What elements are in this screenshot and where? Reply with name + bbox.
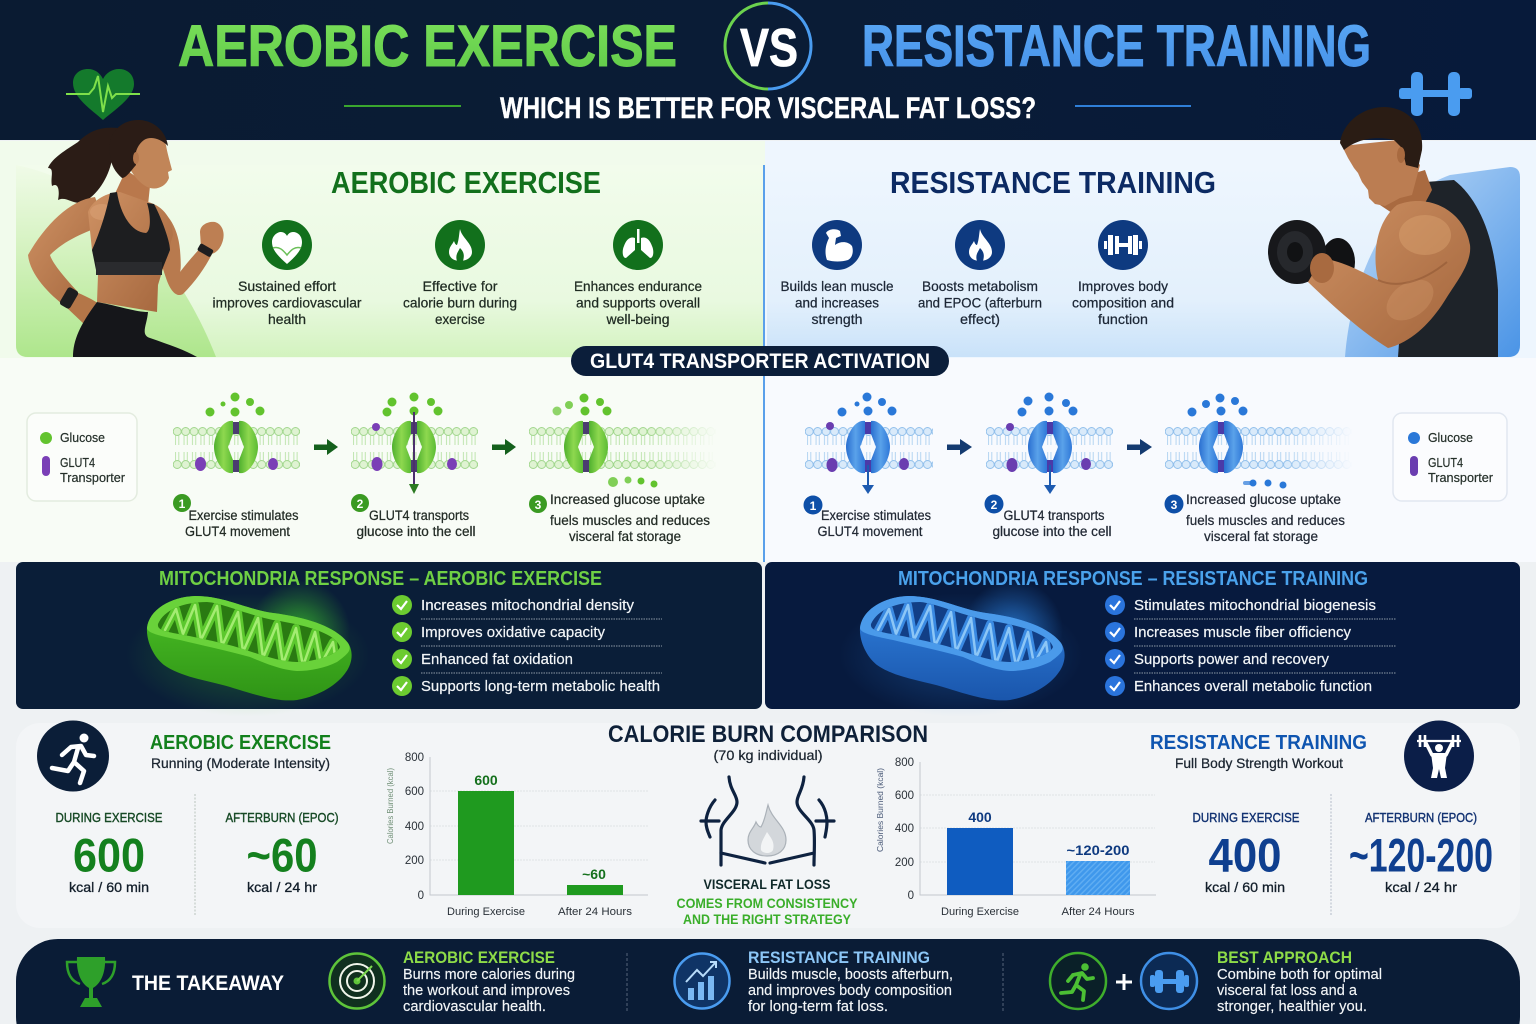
- diagram: step 2: [984, 392, 1113, 539]
- checklist: Increases mitochondrial density: [421, 597, 634, 614]
- centre subheading: (70 kg individual): [714, 747, 822, 763]
- illustration: green mitochondrion: [144, 584, 353, 710]
- legend: aerobic: GLUT4: [60, 456, 95, 470]
- benefit: body composition: [1072, 220, 1174, 327]
- icon: heart with pulse: [66, 69, 140, 120]
- heading: AEROBIC EXERCISE: [331, 165, 601, 200]
- panel: aerobic exercise intro: [0, 120, 765, 358]
- arrow: [492, 439, 516, 455]
- legend: aerobic: [27, 413, 137, 501]
- icon: runner ring: [1050, 953, 1106, 1009]
- takeaway: best approach: BEST APPROACH: [1217, 948, 1352, 967]
- diagram: step 2: glucose into the cell: [356, 524, 476, 539]
- checklist: Supports power and recovery: [1134, 651, 1329, 668]
- resistance stats: AFTERBURN (EPOC): [1365, 810, 1477, 825]
- checklist: [1105, 595, 1396, 696]
- heading: MITOCHONDRIA RESPONSE – AEROBIC EXERCISE: [159, 568, 602, 590]
- checklist: Enhances overall metabolic function: [1134, 678, 1372, 695]
- banner: GLUT4 transporter activation: GLUT4 TRANSPORTER ACTIVATION: [590, 350, 930, 373]
- takeaway: best approach: [1050, 948, 1382, 1015]
- legend: resistance: Transporter: [1428, 471, 1493, 485]
- arrow: [314, 439, 338, 455]
- benefit: lean muscle: and increases: [795, 294, 879, 310]
- bar chart: aerobic: [386, 752, 648, 918]
- resistance stats: 400: [1208, 828, 1282, 882]
- legend: aerobic: Glucose: [60, 431, 105, 445]
- benefit: metabolism: and EPOC (afterburn: [918, 294, 1042, 310]
- heading: RESISTANCE TRAINING: [890, 165, 1216, 200]
- bar chart: aerobic: 600: [474, 772, 498, 788]
- takeaway: best approach: stronger, healthier you.: [1217, 999, 1367, 1015]
- diagram: step 2: [351, 392, 478, 539]
- takeaway: resistance: [674, 948, 953, 1015]
- benefit: body composition: composition and: [1072, 294, 1174, 310]
- icon: trophy: [67, 957, 115, 1007]
- VS badge: [725, 3, 811, 89]
- takeaway: aerobic: cardiovascular health.: [403, 999, 546, 1015]
- checklist: Improves oxidative capacity: [421, 624, 605, 641]
- bar chart: resistance: During Exercise: [941, 906, 1019, 918]
- diagram: step 1: 1: [810, 499, 817, 513]
- takeaway: resistance: Builds muscle, boosts afterburn,: [748, 967, 953, 983]
- bar chart: aerobic: During Exercise: [447, 906, 525, 918]
- bar chart: resistance: ~120-200: [1066, 842, 1130, 858]
- diagram: step 3: 3: [535, 498, 542, 512]
- bar chart: aerobic: 400: [405, 821, 424, 833]
- arrow: [947, 439, 972, 455]
- message: visceral fat loss: [676, 876, 858, 927]
- header band: [0, 0, 1536, 140]
- illustration: blue mitochondrion: [856, 584, 1066, 708]
- takeaway: aerobic: AEROBIC EXERCISE: [403, 948, 555, 967]
- bar chart: aerobic: 600: [405, 786, 424, 798]
- diagram: step 1: [173, 392, 300, 539]
- bar chart: aerobic: 800: [405, 752, 424, 764]
- diagram: step 3: fuels muscles and reduces: [550, 512, 710, 528]
- VS badge: VS: [740, 18, 798, 78]
- benefit: calorie burn: exercise: [435, 311, 485, 327]
- benefit: metabolism: effect): [960, 311, 1000, 327]
- icon: target: [330, 954, 384, 1008]
- title: resistance training: RESISTANCE TRAINING: [862, 14, 1371, 79]
- benefit: lean muscle: strength: [812, 311, 862, 327]
- panel: the takeaway: [16, 939, 1520, 1024]
- aerobic stats: [37, 720, 338, 916]
- resistance stats: DURING EXERCISE: [1192, 810, 1300, 825]
- title: aerobic exercise: AEROBIC EXERCISE: [178, 14, 677, 79]
- diagram: step 2: 2: [357, 497, 364, 511]
- heading: THE TAKEAWAY: [132, 972, 284, 995]
- takeaway: best approach: Combine both for optimal: [1217, 967, 1382, 983]
- diagram: step 2: glucose into the cell: [992, 524, 1112, 539]
- plus sign: [1116, 974, 1132, 990]
- aerobic stats: kcal / 60 min: [69, 879, 149, 895]
- checklist: [392, 595, 662, 696]
- icon: torso with flame: [701, 777, 834, 865]
- takeaway: resistance: for long-term fat loss.: [748, 999, 888, 1015]
- legend: resistance: GLUT4: [1428, 456, 1463, 470]
- takeaway: resistance: RESISTANCE TRAINING: [748, 948, 930, 967]
- resistance stats: kcal / 24 hr: [1385, 879, 1457, 895]
- benefit: lean muscle: Builds lean muscle: [780, 278, 894, 294]
- takeaway: aerobic: [330, 948, 575, 1015]
- diagram: step 3: visceral fat storage: [1204, 528, 1318, 544]
- icon: rising chart: [674, 954, 730, 1008]
- panel: mitochondria aerobic: [16, 562, 762, 717]
- bar chart: aerobic: 0: [418, 890, 424, 902]
- checklist: Supports long-term metabolic health: [421, 678, 660, 695]
- panel: mitochondria resistance: [765, 562, 1520, 717]
- checklist: Stimulates mitochondrial biogenesis: [1134, 597, 1376, 614]
- benefit: endurance: and supports overall: [576, 294, 700, 310]
- subtitle: WHICH IS BETTER FOR VISCERAL FAT LOSS?: [500, 92, 1036, 125]
- centre heading: CALORIE BURN COMPARISON: [608, 721, 928, 748]
- icon: runner badge: [37, 720, 109, 792]
- bar chart: resistance: 0: [908, 890, 914, 902]
- resistance stats: RESISTANCE TRAINING: [1150, 732, 1367, 754]
- legend: resistance: [1393, 413, 1507, 501]
- aerobic stats: Running (Moderate Intensity): [151, 755, 330, 771]
- legend: aerobic: Transporter: [60, 471, 125, 485]
- benefit: body composition: function: [1098, 311, 1148, 327]
- diagram: step 1: Exercise stimulates: [188, 508, 299, 523]
- panel: GLUT4 aerobic side: [0, 358, 764, 562]
- message: visceral fat loss: AND THE RIGHT STRATEGY: [683, 911, 852, 927]
- diagram: step 3: Increased glucose uptake: [550, 491, 705, 507]
- benefit: metabolism: Boosts metabolism: [922, 278, 1038, 294]
- panel: GLUT4 resistance side: [765, 358, 1536, 562]
- checklist: Enhanced fat oxidation: [421, 651, 573, 668]
- diagram: step 1: GLUT4 movement: [185, 524, 290, 539]
- benefit: endurance: [574, 220, 702, 327]
- bar chart: aerobic: 200: [405, 855, 424, 867]
- bar chart: resistance: 400: [895, 823, 914, 835]
- icon: weightlifter badge: [1404, 720, 1474, 792]
- benefit: metabolism: [918, 220, 1042, 327]
- resistance stats: Full Body Strength Workout: [1175, 755, 1343, 771]
- benefit: endurance: well-being: [606, 311, 670, 327]
- diagram: step 3: visceral fat storage: [569, 528, 681, 544]
- bar chart: resistance: 200: [895, 857, 914, 869]
- takeaway: aerobic: the workout and improves: [403, 983, 570, 999]
- heading: MITOCHONDRIA RESPONSE – RESISTANCE TRAINING: [898, 568, 1368, 590]
- diagram: step 3: Increased glucose uptake: [1186, 491, 1341, 507]
- bar chart: resistance: [876, 757, 1156, 918]
- diagram: step 2: GLUT4 transports: [369, 508, 469, 523]
- benefit: cardiovascular: health: [268, 311, 306, 327]
- bar chart: resistance: 800: [895, 757, 914, 769]
- diagram: step 1: 1: [179, 497, 186, 511]
- legend: resistance: Glucose: [1428, 431, 1473, 445]
- benefit: cardiovascular: improves cardiovascular: [212, 294, 362, 310]
- benefit: calorie burn: calorie burn during: [403, 294, 517, 310]
- aerobic stats: AFTERBURN (EPOC): [226, 810, 338, 825]
- takeaway: best approach: visceral fat loss and a: [1217, 983, 1358, 999]
- benefit: lean muscle: [780, 220, 894, 327]
- figure: female runner: [28, 120, 224, 357]
- bar chart: aerobic: Calories Burned (kcal): [386, 768, 395, 844]
- bar chart: aerobic: ~60: [582, 866, 606, 882]
- benefit: calorie burn: [403, 220, 517, 327]
- checklist: Increases muscle fiber officiency: [1134, 624, 1351, 641]
- bar chart: resistance: After 24 Hours: [1062, 906, 1135, 918]
- benefit: cardiovascular: Sustained effort: [238, 278, 336, 294]
- benefit: endurance: Enhances endurance: [574, 278, 702, 294]
- diagram: step 2: GLUT4 transports: [1004, 508, 1105, 523]
- diagram: step 3: 3: [1171, 498, 1178, 512]
- diagram: step 3: [1164, 394, 1353, 544]
- icon: dumbbell ring: [1141, 953, 1197, 1009]
- diagram: step 3: [529, 394, 718, 544]
- aerobic stats: AEROBIC EXERCISE: [150, 732, 331, 754]
- aerobic stats: kcal / 24 hr: [247, 879, 317, 895]
- aerobic stats: 600: [73, 828, 145, 882]
- benefit: calorie burn: Effective for: [422, 278, 498, 294]
- figure: man with dumbbell: [1268, 107, 1498, 357]
- arrow: [1127, 439, 1152, 455]
- diagram: step 3: fuels muscles and reduces: [1186, 512, 1345, 528]
- bar chart: aerobic: After 24 Hours: [558, 906, 633, 918]
- diagram: step 1: GLUT4 movement: [818, 524, 923, 539]
- bar chart: resistance: Calories Burned (kcal): [876, 768, 885, 852]
- diagram: step 2: 2: [991, 498, 998, 512]
- panel: calorie burn comparison: [16, 720, 1520, 928]
- resistance stats: [1150, 720, 1493, 916]
- takeaway: resistance: and improves body composition: [748, 983, 952, 999]
- message: visceral fat loss: COMES FROM CONSISTENCY: [676, 895, 858, 911]
- resistance stats: kcal / 60 min: [1205, 879, 1285, 895]
- aerobic stats: DURING EXERCISE: [56, 810, 163, 825]
- bar chart: resistance: 400: [968, 809, 992, 825]
- benefit: body composition: Improves body: [1078, 278, 1168, 294]
- benefit: cardiovascular: [212, 220, 362, 327]
- message: visceral fat loss: VISCERAL FAT LOSS: [704, 876, 830, 892]
- aerobic stats: ~60: [246, 828, 318, 882]
- bar chart: resistance: 600: [895, 790, 914, 802]
- diagram: step 1: Exercise stimulates: [821, 508, 931, 523]
- takeaway: aerobic: Burns more calories during: [403, 967, 575, 983]
- diagram: step 1: [804, 392, 933, 539]
- icon: dumbbell: [1399, 72, 1472, 116]
- panel: resistance training intro: [765, 107, 1536, 358]
